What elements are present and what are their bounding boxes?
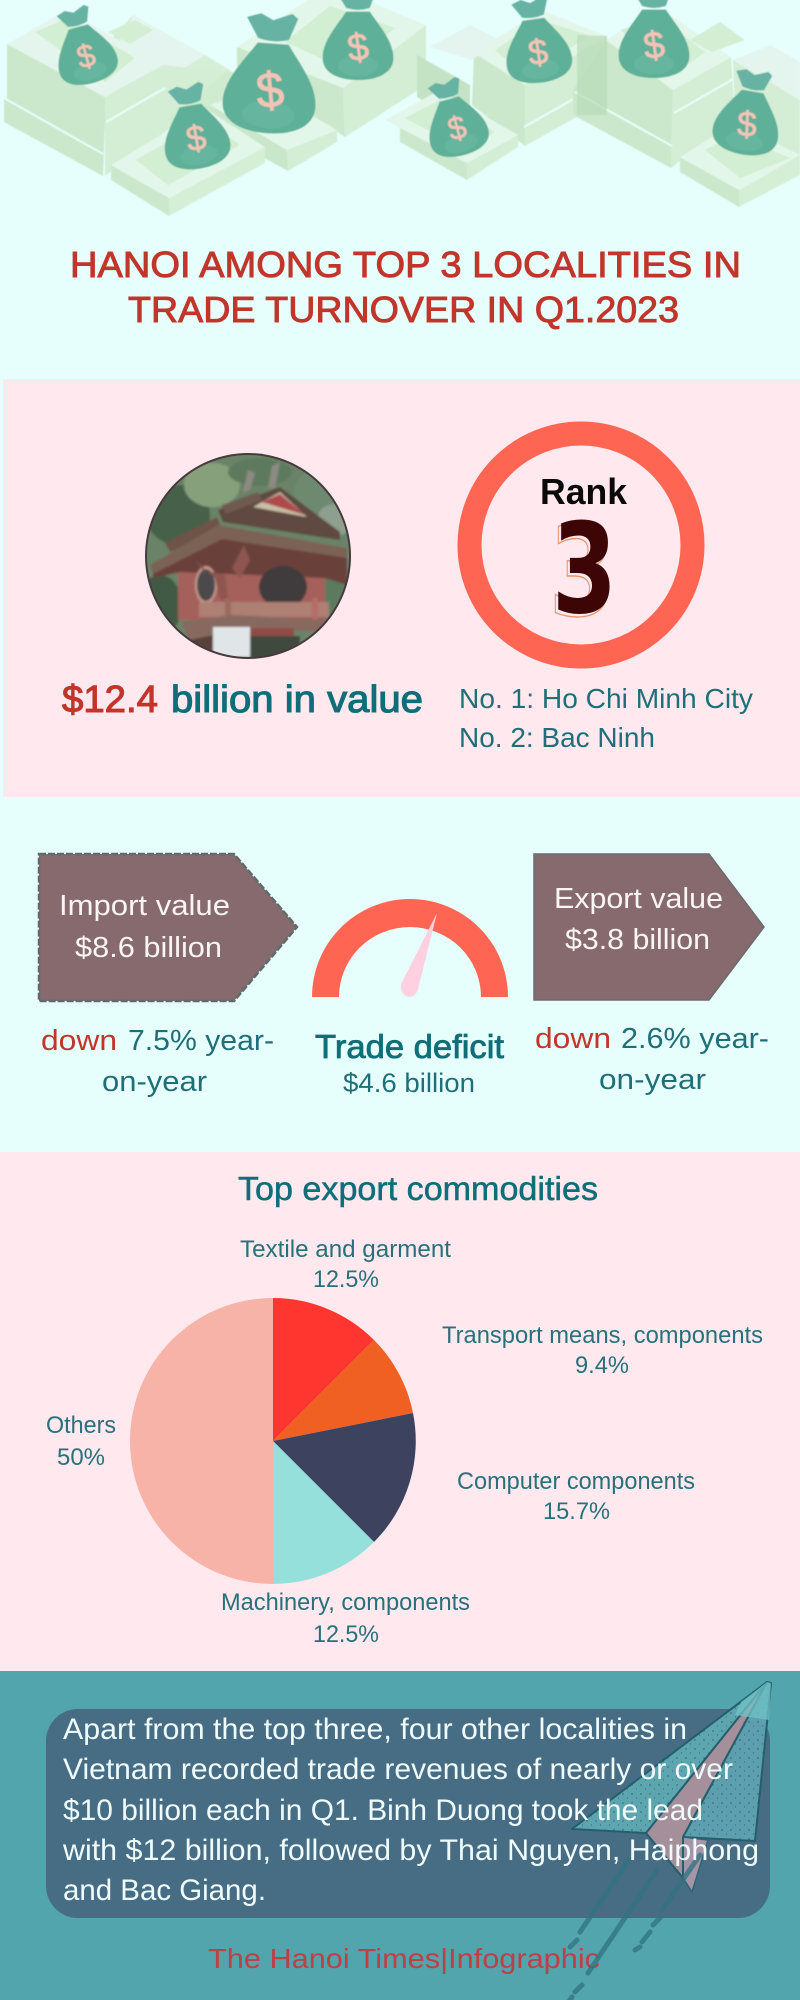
export change <box>535 1023 769 1096</box>
rank number: 3 <box>552 497 617 642</box>
label: others <box>46 1412 116 1471</box>
import arrow <box>39 854 297 1001</box>
gauge <box>312 899 508 997</box>
title: TRADE TURNOVER IN Q1.2023 <box>128 289 679 330</box>
title: HANOI AMONG TOP 3 LOCALITIES IN <box>70 244 741 285</box>
photo: temple <box>145 453 351 659</box>
money stacks <box>4 0 800 216</box>
label: computer <box>457 1468 695 1525</box>
panel: top export commodities <box>0 1152 800 1671</box>
label: others: Others <box>46 1412 116 1439</box>
ranking list: No. 1: Ho Chi Minh City <box>459 683 753 714</box>
label: others: 50% <box>57 1444 105 1471</box>
export arrow <box>534 854 764 1000</box>
icon: money bag 7 <box>619 0 689 78</box>
text box <box>46 1709 770 1918</box>
trade deficit: $4.6 billion <box>343 1068 475 1098</box>
icon: money bag 5: $ <box>444 108 470 148</box>
icon: money bag 1 <box>44 0 122 91</box>
rank number: 3 <box>549 500 615 645</box>
import change: down <box>41 1025 117 1057</box>
chart heading: Top export commodities <box>238 1170 598 1207</box>
panel: closing note <box>0 1671 800 2000</box>
icon: money bag 7: $ <box>641 24 667 68</box>
icon: money bag 6: $ <box>526 32 550 73</box>
value text: billion in value <box>171 679 423 721</box>
ranking list: No. 2: Bac Ninh <box>459 722 655 753</box>
paragraph <box>62 1713 759 1907</box>
icon: money bag 4: $ <box>345 26 371 70</box>
label: computer: 15.7% <box>543 1498 610 1525</box>
import arrow: $8.6 billion <box>75 932 222 964</box>
icon: money bag 3: $ <box>254 61 286 119</box>
icon: money bag 3 <box>221 9 322 137</box>
icon: paper airplane <box>568 1682 771 2000</box>
export arrow: $3.8 billion <box>565 924 710 956</box>
icon: money bag 1: $ <box>73 36 99 76</box>
paragraph: $10 billion each in Q1. Binh Duong took the lead <box>63 1794 703 1827</box>
icon: money bag 8 <box>709 64 789 160</box>
label: transport: 9.4% <box>575 1352 629 1379</box>
label: textile: Textile and garment <box>240 1236 451 1263</box>
icon: money bag 8: $ <box>737 105 757 144</box>
label: textile: 12.5% <box>313 1266 379 1293</box>
import change: 7.5% year- <box>128 1025 274 1057</box>
illustration: money stacks and bags <box>4 0 800 216</box>
gauge needle <box>401 913 437 997</box>
label: computer: Computer components <box>457 1468 695 1495</box>
value text: $12.4 <box>62 679 158 721</box>
ranking list <box>459 683 753 753</box>
panel: overview <box>3 379 800 797</box>
paragraph: with $12 billion, followed by Thai Nguyen, Haiphong <box>62 1834 759 1867</box>
label: machinery: 12.5% <box>313 1621 379 1648</box>
export change: on-year <box>599 1064 706 1096</box>
label: transport: Transport means, components <box>442 1322 763 1349</box>
label: textile <box>240 1236 451 1293</box>
icon: money bag 4 <box>323 0 393 80</box>
credit: The Hanoi Times|Infographic <box>208 1943 600 1974</box>
label: machinery <box>221 1589 470 1648</box>
label: transport <box>442 1322 763 1379</box>
paragraph: Apart from the top three, four other localities in <box>63 1713 687 1746</box>
import change <box>41 1025 274 1098</box>
icon: money bag 2 <box>154 78 234 174</box>
export arrow: Export value <box>554 883 723 915</box>
export change: 2.6% year- <box>621 1023 769 1055</box>
export change: down <box>535 1023 611 1055</box>
label: machinery: Machinery, components <box>221 1589 470 1616</box>
title <box>70 244 741 330</box>
icon: rank ring <box>470 434 692 656</box>
pie chart <box>130 1298 416 1584</box>
import arrow: Import value <box>59 890 230 922</box>
trade deficit <box>315 1028 504 1098</box>
trade deficit: Trade deficit <box>315 1028 504 1065</box>
icon: money bag 6 <box>498 0 575 87</box>
icon: money bag 5 <box>415 72 493 163</box>
rank label: Rank <box>540 471 628 512</box>
paragraph: Vietnam recorded trade revenues of nearly or over <box>63 1753 733 1786</box>
paragraph: and Bac Giang. <box>63 1874 266 1907</box>
value text <box>62 679 423 721</box>
icon: money bag 2: $ <box>183 118 209 159</box>
panel: trade values <box>39 854 769 1098</box>
import change: on-year <box>102 1066 207 1098</box>
labels <box>46 1236 763 1648</box>
